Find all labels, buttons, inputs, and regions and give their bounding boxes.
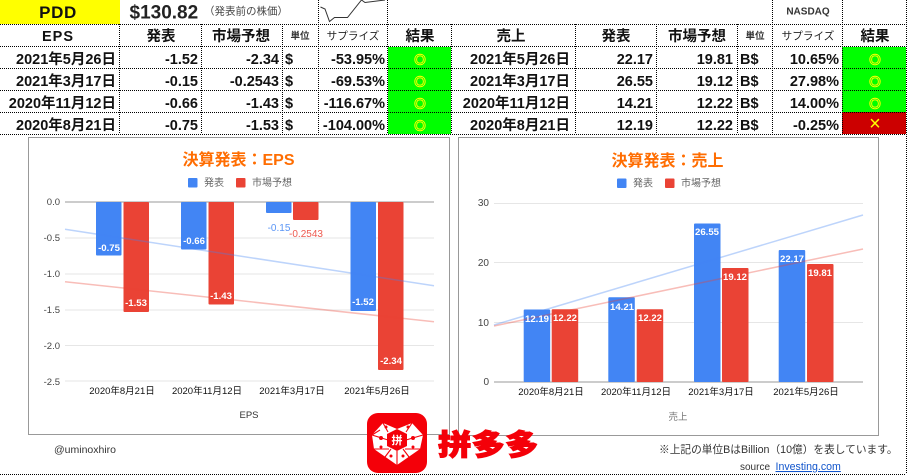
EPS category labels: 2021年5月26日 xyxy=(344,385,410,397)
EPS row 2021年3月17日: ◎ xyxy=(414,75,426,89)
sales row 2020年8月21日: 2020年8月21日 xyxy=(470,116,570,134)
EPS row 2021年5月26日: 2021年5月26日 xyxy=(16,50,116,68)
sales chart title: 決算発表：売上 xyxy=(611,151,724,170)
EPS category labels: 2020年11月12日 xyxy=(172,385,242,397)
EPS row 2020年11月12日: ◎ xyxy=(414,97,426,111)
sales trend lines xyxy=(494,215,863,326)
EPS row 2020年8月21日: -104.00% xyxy=(323,118,385,134)
EPS chart legend xyxy=(188,176,292,189)
sales row 2021年3月17日: B$ xyxy=(740,74,759,90)
EPS row 2020年8月21日: -0.75 xyxy=(165,118,198,134)
ticker cell: PDD: PDD xyxy=(39,3,77,22)
sales row 2020年8月21日: 12.22 xyxy=(697,118,733,134)
EPS row 2020年11月12日: $ xyxy=(285,96,293,112)
EPS bars: 発表 xyxy=(96,202,376,311)
sales value labels: 12.19 xyxy=(525,314,549,325)
EPS value labels: -1.53 xyxy=(125,298,147,309)
sales category labels: 2020年11月12日 xyxy=(601,386,671,398)
EPS row 2021年5月26日: -2.34 xyxy=(246,52,279,68)
EPS row 2021年3月17日: 2021年3月17日 xyxy=(16,72,116,90)
sales row 2020年11月12日: B$ xyxy=(740,96,759,112)
EPS category labels xyxy=(89,385,410,397)
sales category labels xyxy=(518,386,839,398)
sales row 2021年5月26日: 10.65% xyxy=(790,52,839,68)
EPS chart title: 決算発表：EPS xyxy=(182,150,295,169)
sales row 2020年11月12日: 2020年11月12日 xyxy=(463,94,570,112)
EPS trend lines xyxy=(65,229,434,322)
EPS value labels: -0.15 xyxy=(268,223,291,234)
EPS table header: 結果 xyxy=(406,27,435,45)
source credit: Investing.com xyxy=(776,461,841,473)
EPS row 2021年5月26日 xyxy=(16,50,426,68)
EPS row 2021年3月17日: $ xyxy=(285,74,293,90)
EPS chart y axis and grid: 0.0 xyxy=(47,197,60,208)
sales row 2020年11月12日: 14.00% xyxy=(790,96,839,112)
sales row 2020年8月21日: × xyxy=(869,113,881,135)
author handle: @uminoxhiro xyxy=(54,444,116,456)
sales row 2020年11月12日: ◎ xyxy=(869,97,881,111)
EPS row 2021年3月17日: -69.53% xyxy=(331,74,385,90)
sales value labels: 14.21 xyxy=(610,302,635,313)
sales table header: 結果 xyxy=(860,27,890,45)
sales table header: サプライズ xyxy=(782,30,835,42)
sales row 2021年3月17日: ◎ xyxy=(869,75,881,89)
EPS row 2020年8月21日: $ xyxy=(285,118,293,134)
sales table header: 市場予想 xyxy=(668,27,726,45)
sales chart y axis and grid: 10 xyxy=(478,318,489,329)
EPS value labels: -1.43 xyxy=(210,291,232,302)
sales value labels: 22.17 xyxy=(780,254,804,265)
sales value labels xyxy=(525,227,833,325)
sales bars: 発表 xyxy=(524,224,805,382)
EPS chart y axis and grid: -2.0 xyxy=(44,341,60,352)
EPS table header xyxy=(42,27,435,45)
sales row 2021年3月17日: 2021年3月17日 xyxy=(470,72,570,90)
EPS row 2020年11月12日: 2020年11月12日 xyxy=(9,94,116,112)
sales value labels: 12.22 xyxy=(553,313,577,324)
sales chart y axis and grid xyxy=(478,198,863,388)
EPS row 2021年3月17日 xyxy=(16,72,426,90)
sales bars: 市場予想 xyxy=(552,264,834,382)
EPS table header: EPS xyxy=(42,29,74,45)
sales row 2021年5月26日: 2021年5月26日 xyxy=(470,50,570,68)
EPS category labels: 2021年3月17日 xyxy=(259,385,325,397)
EPS row 2021年5月26日: -1.52 xyxy=(165,52,198,68)
sales chart legend: 市場予想 xyxy=(681,176,721,190)
EPS value labels: -2.34 xyxy=(380,356,403,367)
EPS row 2020年8月21日: -1.53 xyxy=(246,118,279,134)
sales category labels: 2020年8月21日 xyxy=(518,386,584,398)
sales value labels: 26.55 xyxy=(695,227,720,238)
sales table header: 発表 xyxy=(602,27,631,45)
sales row 2021年3月17日: 27.98% xyxy=(790,74,839,90)
EPS row 2020年8月21日 xyxy=(16,116,426,134)
EPS row 2020年8月21日: 2020年8月21日 xyxy=(16,116,116,134)
sales chart legend: 発表 xyxy=(633,176,653,190)
EPS value labels: -1.52 xyxy=(352,297,374,308)
EPS chart y axis and grid: -1.5 xyxy=(44,305,60,316)
exchange label: NASDAQ xyxy=(786,6,830,18)
EPS row 2021年3月17日: -0.15 xyxy=(165,74,198,90)
sales row 2020年8月21日: 12.19 xyxy=(617,118,653,134)
sales category labels: 2021年5月26日 xyxy=(773,386,839,398)
result cell fills xyxy=(388,47,906,134)
sparkline: share price xyxy=(320,0,385,22)
sales row 2021年5月26日 xyxy=(470,50,881,68)
EPS chart y axis and grid xyxy=(44,197,434,388)
EPS value labels: -0.75 xyxy=(98,243,121,254)
ticker cell: PDD xyxy=(0,0,120,24)
share price before earnings: （発表前の株価） xyxy=(204,4,288,18)
source credit xyxy=(740,461,841,473)
logo: Pinduoduo xyxy=(367,413,538,473)
share price before earnings xyxy=(130,2,288,24)
sales value labels: 19.12 xyxy=(723,272,747,283)
share price before earnings: $130.82 xyxy=(130,2,198,24)
icon: Pinduoduo heart xyxy=(367,413,427,473)
sales row 2021年5月26日: ◎ xyxy=(869,53,881,67)
source credit: source xyxy=(740,462,770,473)
EPS chart y axis and grid: -0.5 xyxy=(44,233,60,244)
sales row 2021年5月26日: 19.81 xyxy=(697,52,733,68)
sales row 2020年8月21日 xyxy=(470,113,881,135)
EPS bars: 市場予想 xyxy=(124,202,404,370)
sales row 2021年3月17日: 26.55 xyxy=(617,74,653,90)
panel: sales chart xyxy=(458,138,878,436)
logo wordmark: 拼多多 xyxy=(438,429,538,461)
sales value labels: 12.22 xyxy=(638,313,662,324)
EPS row 2020年11月12日 xyxy=(9,94,426,112)
sales row 2021年3月17日: 19.12 xyxy=(697,74,733,90)
table: sales xyxy=(463,27,890,135)
table: EPS xyxy=(9,27,435,134)
EPS table header: サプライズ xyxy=(327,30,380,42)
panel: EPS chart xyxy=(28,138,450,434)
sales table header: 売上 xyxy=(496,28,526,45)
sales row 2020年8月21日: -0.25% xyxy=(793,118,839,134)
sales table header: 単位 xyxy=(745,30,765,42)
sales row 2021年5月26日: 22.17 xyxy=(617,52,653,68)
sales chart y axis and grid: 30 xyxy=(478,198,489,209)
EPS chart legend: 発表 xyxy=(204,176,224,189)
sales chart y axis and grid: 20 xyxy=(478,258,489,269)
EPS row 2020年11月12日: -0.66 xyxy=(165,96,198,112)
EPS table header: 発表 xyxy=(146,27,176,45)
EPS chart y axis and grid: -1.0 xyxy=(44,269,60,280)
sales table header xyxy=(496,27,890,45)
EPS row 2021年5月26日: ◎ xyxy=(414,53,426,67)
sales row 2021年3月17日 xyxy=(470,72,881,90)
EPS table header: 市場予想 xyxy=(212,27,270,45)
EPS value labels: -0.2543 xyxy=(289,229,323,240)
EPS chart legend: 市場予想 xyxy=(252,176,292,189)
sales row 2020年11月12日: 12.22 xyxy=(697,96,733,112)
sales axis title: 売上 xyxy=(668,411,688,423)
sales chart legend xyxy=(617,176,721,190)
EPS category labels: 2020年8月21日 xyxy=(89,385,155,397)
sales value labels: 19.81 xyxy=(808,268,833,279)
EPS row 2021年5月26日: $ xyxy=(285,52,293,68)
EPS table header: 単位 xyxy=(290,30,310,42)
sales row 2020年8月21日: B$ xyxy=(740,118,759,134)
sales category labels: 2021年3月17日 xyxy=(688,386,754,398)
EPS value labels: -0.66 xyxy=(183,236,205,247)
sales row 2021年5月26日: B$ xyxy=(740,52,759,68)
EPS row 2020年11月12日: -1.43 xyxy=(246,96,279,112)
EPS row 2021年5月26日: -53.95% xyxy=(331,52,385,68)
icon: Pinduoduo heart: 拼 xyxy=(392,433,402,447)
EPS row 2020年8月21日: ◎ xyxy=(414,119,426,133)
EPS row 2020年11月12日: -116.67% xyxy=(324,96,385,112)
EPS chart y axis and grid: -2.5 xyxy=(44,377,60,388)
sales chart y axis and grid: 0 xyxy=(483,377,489,388)
sales row 2020年11月12日 xyxy=(463,94,881,112)
footnote: unit: ※上記の単位BはBillion（10億）を表しています。 xyxy=(659,443,898,456)
EPS axis title: EPS xyxy=(239,410,259,421)
EPS row 2021年3月17日: -0.2543 xyxy=(230,74,279,90)
sales row 2020年11月12日: 14.21 xyxy=(617,96,653,112)
EPS value labels xyxy=(98,223,403,367)
